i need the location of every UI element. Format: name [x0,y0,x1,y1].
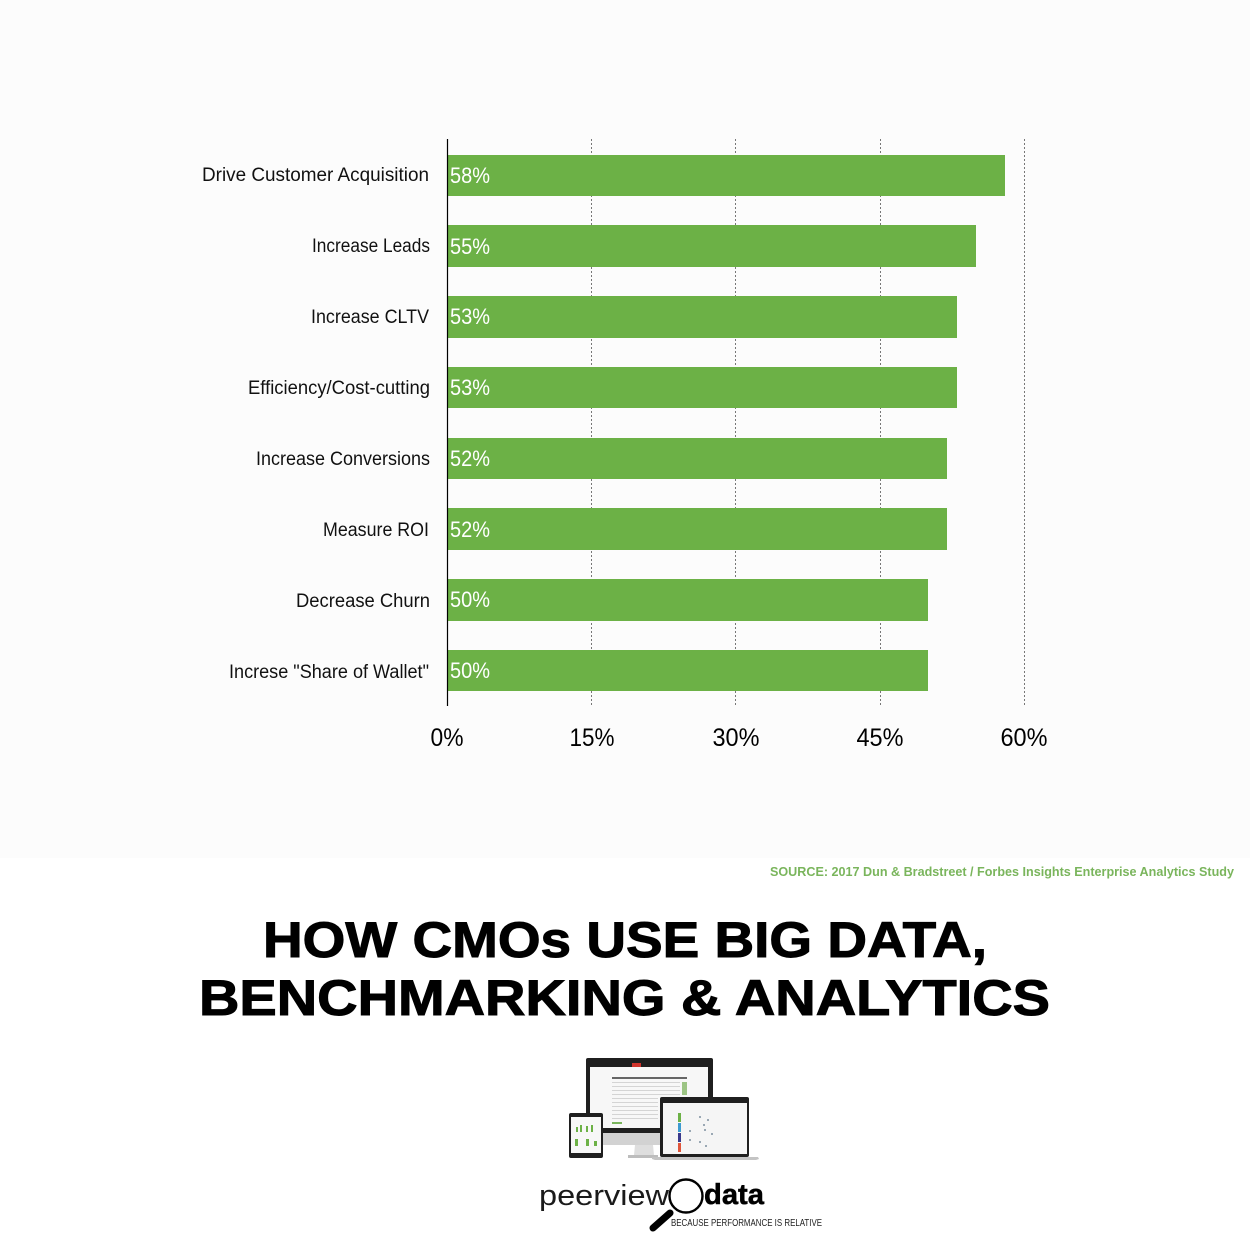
bar: Increase Share of Wallet [447,650,928,691]
bar: Decrease Churn: 50% [450,587,490,612]
category labels: Increase Leads [312,236,430,257]
bar: Increase Leads [447,225,976,267]
category labels: Measure ROI [323,520,429,541]
bar: Drive Customer Acquisition [447,155,1005,196]
logo wordmark: data: data [704,1179,765,1211]
source note: SOURCE: 2017 Dun & Bradstreet / Forbes Insights Enterprise Analytics Study [770,864,1235,879]
logo wordmark: peerview: peerview [539,1180,670,1212]
icon: tablet [569,1113,603,1158]
bar: Decrease Churn [447,579,928,621]
axis labels: 60% [1000,724,1048,752]
axis labels: 0% [430,724,464,752]
axis labels [430,724,1048,752]
icon: devices [569,1058,759,1160]
bar: Increase Leads: 55% [450,234,490,259]
category labels: Increse "Share of Wallet" [229,662,429,683]
logo tagline: BECAUSE PERFORMANCE IS RELATIVE [671,1218,822,1229]
bar: Increase CLTV: 53% [450,304,490,329]
title [199,912,1050,1026]
title: HOW CMOs USE BIG DATA, [263,912,987,968]
category labels: Efficiency/Cost-cutting [248,378,430,399]
icon: desktop monitor [586,1058,713,1158]
axis labels: 45% [856,724,904,752]
category labels: Drive Customer Acquisition [202,165,429,186]
icon: magnifying glass [653,1180,702,1228]
bar: Efficiency/Cost-cutting: 53% [450,375,490,400]
bar: Increase CLTV [447,296,957,338]
bar: Efficiency/Cost-cutting [447,367,957,408]
axis labels: 30% [712,724,760,752]
axis labels: 15% [570,724,614,752]
title: BENCHMARKING & ANALYTICS [199,970,1050,1026]
category labels: Decrease Churn [296,591,430,612]
category labels [202,165,430,683]
bar: Drive Customer Acquisition: 58% [450,163,490,188]
bar: Measure ROI: 52% [450,517,490,542]
logo: peerview data [539,1179,822,1229]
bar: Increase Conversions [447,438,947,479]
category labels: Increase CLTV [311,307,429,328]
bar chart [447,139,1024,706]
bar: Measure ROI [447,508,947,550]
icon: laptop [652,1097,759,1160]
category labels: Increase Conversions [256,449,430,470]
bar: Increase Conversions: 52% [450,446,490,471]
bar: Increase Share of Wallet: 50% [450,658,490,683]
panel: chart background [0,0,1250,858]
